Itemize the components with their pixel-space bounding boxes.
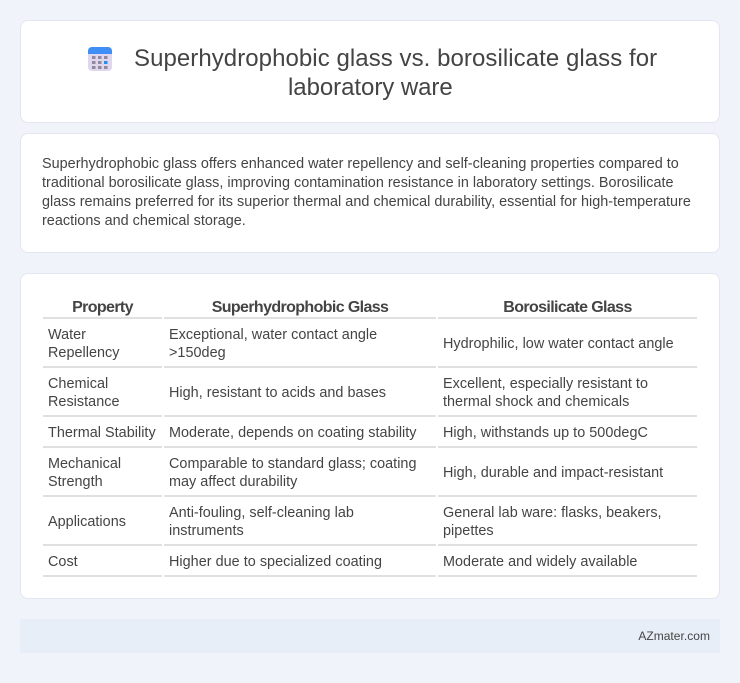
row: water repellency bbox=[48, 327, 120, 361]
row: mechanical strength bbox=[48, 456, 121, 490]
row: cost: Cost bbox=[48, 554, 78, 570]
cell: >150deg bbox=[169, 345, 226, 361]
row: thermal stability: Thermal Stability bbox=[48, 425, 156, 441]
row: water repellency: Repellency bbox=[48, 345, 120, 361]
row: chemical resistance: Resistance bbox=[48, 394, 120, 410]
row: chemical resistance: Chemical bbox=[48, 376, 108, 392]
table header: property: Property bbox=[72, 299, 133, 316]
table header: borosilicate glass: Borosilicate Glass bbox=[503, 299, 632, 316]
row: mechanical strength: Strength bbox=[48, 474, 103, 490]
cell: Anti-fouling, self-cleaning lab bbox=[169, 505, 354, 521]
row: mechanical strength: Mechanical bbox=[48, 456, 121, 472]
cell bbox=[443, 505, 662, 539]
cell bbox=[169, 327, 377, 361]
cell: High, withstands up to 500degC bbox=[443, 425, 648, 441]
intro text: glass remains preferred for its superior thermal and chemical durability, essential for high-temperature bbox=[42, 194, 691, 210]
cell bbox=[443, 376, 648, 410]
intro text bbox=[42, 156, 691, 229]
title: Superhydrophobic glass vs. borosilicate glass for bbox=[134, 45, 657, 72]
panel: introduction bbox=[20, 133, 720, 253]
panel: title bbox=[20, 20, 720, 123]
row: chemical resistance bbox=[48, 376, 120, 410]
cell: General lab ware: flasks, beakers, bbox=[443, 505, 662, 521]
cell: Excellent, especially resistant to bbox=[443, 376, 648, 392]
cell bbox=[169, 456, 416, 490]
cell: High, resistant to acids and bases bbox=[169, 385, 386, 401]
cell: may affect durability bbox=[169, 474, 297, 490]
cell bbox=[169, 505, 354, 539]
cell: Higher due to specialized coating bbox=[169, 554, 382, 570]
table header: superhydrophobic glass: Superhydrophobic Glass bbox=[212, 299, 388, 316]
title line 2: laboratory ware bbox=[288, 74, 453, 101]
cell: Moderate, depends on coating stability bbox=[169, 425, 417, 441]
intro text: Superhydrophobic glass offers enhanced water repellency and self-cleaning properties compared to bbox=[42, 156, 679, 172]
cell: Exceptional, water contact angle bbox=[169, 327, 377, 343]
panel: comparison table bbox=[20, 273, 720, 599]
intro text: reactions and chemical storage. bbox=[42, 213, 246, 229]
cell: pipettes bbox=[443, 523, 494, 539]
cell: Moderate and widely available bbox=[443, 554, 637, 570]
cell: High, durable and impact-resistant bbox=[443, 465, 663, 481]
cell: instruments bbox=[169, 523, 244, 539]
row: water repellency: Water bbox=[48, 327, 86, 343]
cell: thermal shock and chemicals bbox=[443, 394, 629, 410]
row: applications: Applications bbox=[48, 514, 126, 530]
cell: Hydrophilic, low water contact angle bbox=[443, 336, 674, 352]
intro text: traditional borosilicate glass, improving contamination resistance in laboratory settings. Borosilicate bbox=[42, 175, 674, 191]
icon: calendar bbox=[88, 47, 112, 71]
footer bar bbox=[20, 619, 720, 653]
cell: Comparable to standard glass; coating bbox=[169, 456, 416, 472]
footer text: AZmater.com bbox=[638, 629, 710, 643]
